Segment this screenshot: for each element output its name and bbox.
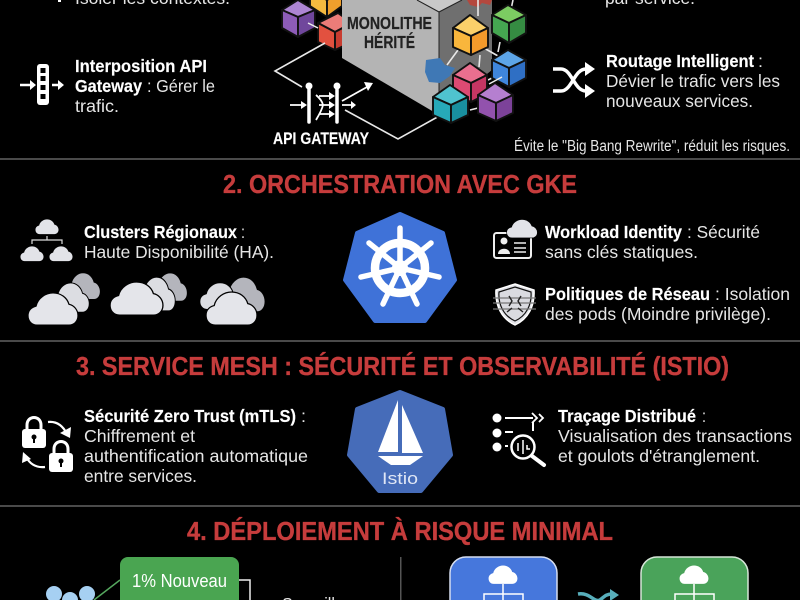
monolith block	[342, 0, 492, 115]
text block: zero trust: :	[301, 406, 306, 426]
heading: section 2: 2. ORCHESTRATION AVEC GKE	[223, 171, 577, 199]
canary box: 1% nouveau: 1% Nouveau	[132, 570, 227, 591]
text block: clusters regionaux: :	[241, 222, 245, 242]
cube: red left	[318, 13, 352, 50]
text block: interposition API gateway: trafic.	[75, 96, 119, 116]
diagram: monolith and microservices	[275, 0, 526, 139]
icon: users	[46, 586, 95, 600]
text block: zero trust: entre services.	[84, 466, 197, 486]
cube: teal	[433, 85, 468, 123]
text block: zero trust: Sécurité Zero Trust (mTLS)	[84, 406, 296, 426]
text block: interposition API gateway: Gateway	[75, 76, 142, 96]
text block: workload identity	[545, 222, 760, 262]
icon: istio logo	[349, 392, 451, 491]
icon: API gateway in diagram	[290, 82, 373, 122]
icon: API gateway interposition	[20, 64, 64, 105]
arrow: blue to green switch	[578, 589, 619, 600]
icon: clusters hierarchy	[20, 219, 73, 261]
icon: istio logo: Istio	[382, 469, 418, 488]
cube: purple right	[478, 83, 513, 121]
clouds: regional clusters group 2	[110, 273, 187, 315]
monolith label	[347, 13, 432, 52]
text block: interposition API gateway	[75, 56, 215, 116]
icon: kubernetes logo	[345, 214, 455, 321]
text block: politiques de reseau: : Isolation	[715, 284, 790, 304]
text block: clusters regionaux: Clusters Régionaux	[84, 222, 237, 242]
text block: politiques de reseau: des pods (Moindre privilège).	[545, 304, 771, 324]
cube: pink	[453, 63, 487, 102]
text block: zero trust: authentification automatique	[84, 446, 308, 466]
monolith label: HÉRITÉ	[364, 31, 415, 52]
text block: clusters regionaux: Haute Disponibilité (HA).	[84, 242, 274, 262]
text block: tracing	[558, 406, 792, 466]
text block: zero trust: Chiffrement et	[84, 426, 195, 446]
text block: zero trust	[84, 406, 308, 486]
cube: green	[492, 5, 526, 43]
connection lines	[275, 0, 513, 139]
label: API gateway: API GATEWAY	[273, 129, 370, 148]
text block: interposition API gateway: : Gérer le	[147, 76, 215, 96]
text block: tracing: Visualisation des transactions	[558, 426, 792, 446]
blue environment box	[450, 557, 557, 600]
text block: clusters regionaux	[84, 222, 274, 262]
text block: politiques de reseau: Politiques de Réseau	[545, 284, 710, 304]
text block: tracing: et goulots d'étranglement.	[558, 446, 760, 466]
monolith label: MONOLITHE	[347, 13, 432, 33]
canary box: 1% nouveau	[94, 557, 250, 600]
text block: workload identity: : Sécurité	[687, 222, 760, 242]
icon: distributed tracing	[492, 413, 544, 465]
text block: workload identity: Workload Identity	[545, 222, 682, 242]
text block: tracing: Traçage Distribué	[558, 406, 696, 426]
text block: routage intelligent: :	[758, 51, 763, 71]
heading: section 3: 3. SERVICE MESH : SÉCURITÉ ET OBSERVABILITÉ (ISTIO)	[76, 352, 729, 381]
text block: routage intelligent: Dévier le trafic vers les	[606, 71, 780, 91]
text block: routage intelligent: nouveaux services.	[606, 91, 753, 111]
text block: routage intelligent: Routage Intelligent	[606, 51, 754, 71]
clouds: regional clusters group 1	[28, 273, 100, 325]
green environment box	[641, 557, 748, 600]
migrated fragments	[425, 0, 492, 83]
cube: purple left	[282, 0, 315, 37]
cube: orange top left	[310, 0, 342, 17]
text block: workload identity: sans clés statiques.	[545, 242, 698, 262]
icon: mTLS locks	[22, 418, 73, 472]
icon: network policy shield	[493, 284, 536, 325]
icon: routage shuffle	[553, 62, 595, 98]
cube: yellow	[453, 15, 488, 55]
text block: interposition API gateway: Interposition API	[75, 56, 207, 76]
heading: section 4: 4. DÉPLOIEMENT À RISQUE MINIMAL	[187, 517, 613, 546]
text block: routage intelligent	[606, 51, 780, 111]
icon: workload identity	[494, 220, 537, 258]
clouds: regional clusters group 3	[200, 277, 265, 325]
text block: tracing: :	[702, 406, 706, 426]
cube: blue	[492, 50, 526, 87]
text block: politiques de reseau	[545, 284, 790, 324]
